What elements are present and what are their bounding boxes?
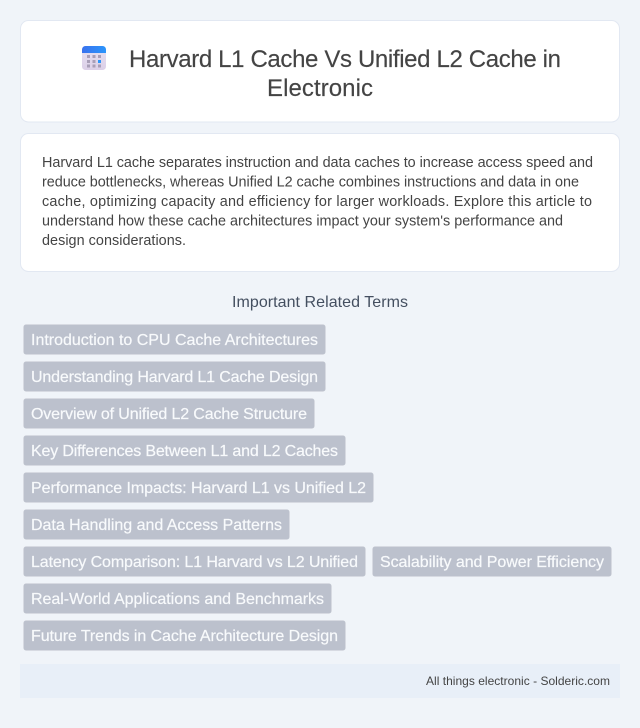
title bbox=[129, 46, 561, 102]
icon: calendar grid bbox=[82, 46, 106, 70]
title: Electronic bbox=[267, 75, 373, 102]
tag: latency comparison bbox=[24, 546, 366, 576]
text block: description: understand how these cache architectures impact your system's performance and bbox=[42, 214, 563, 230]
tag: future trends bbox=[24, 620, 346, 650]
tag: performance impacts bbox=[24, 472, 374, 502]
heading: important related terms: Important Related Terms bbox=[232, 294, 408, 311]
tag: scalability bbox=[372, 546, 612, 576]
tag: scalability: Scalability and Power Efficiency bbox=[380, 554, 604, 571]
tag: performance impacts: Performance Impacts: Harvard L1 vs Unified L2 bbox=[31, 480, 366, 497]
tag: future trends: Future Trends in Cache Architecture Design bbox=[31, 628, 338, 645]
tag: overview unified: Overview of Unified L2 Cache Structure bbox=[31, 406, 307, 423]
tag: latency comparison: Latency Comparison: L1 Harvard vs L2 Unified bbox=[31, 554, 358, 571]
tag: real-world: Real-World Applications and Benchmarks bbox=[31, 591, 324, 608]
tag: introduction bbox=[24, 324, 326, 354]
panel: title header bbox=[20, 20, 620, 122]
tag: overview unified bbox=[24, 398, 314, 428]
text block: description: Harvard L1 cache separates instruction and data caches to increase access speed and bbox=[42, 155, 593, 171]
footer bbox=[20, 664, 620, 698]
tag: understanding harvard bbox=[24, 362, 326, 392]
tag: real-world bbox=[24, 584, 332, 614]
text block: description: cache, optimizing capacity and efficiency for larger workloads. Explore this article to bbox=[42, 194, 592, 210]
panel: description bbox=[20, 134, 620, 272]
footer: All things electronic - Solderic.com bbox=[426, 674, 610, 688]
text block: description bbox=[42, 155, 593, 249]
panel: related term tags bbox=[24, 324, 612, 650]
text block: description: reduce bottlenecks, whereas Unified L2 cache combines instructions and data in one bbox=[42, 174, 579, 190]
tag: understanding harvard: Understanding Harvard L1 Cache Design bbox=[31, 369, 318, 386]
text block: description: design considerations. bbox=[42, 233, 186, 249]
title: Harvard L1 Cache Vs Unified L2 Cache in bbox=[129, 46, 561, 73]
tag: data handling: Data Handling and Access Patterns bbox=[31, 517, 282, 534]
tag: introduction: Introduction to CPU Cache Architectures bbox=[31, 332, 318, 349]
tag: data handling bbox=[24, 510, 290, 540]
tag: key differences: Key Differences Between L1 and L2 Caches bbox=[31, 443, 338, 460]
tag: key differences bbox=[24, 436, 346, 466]
